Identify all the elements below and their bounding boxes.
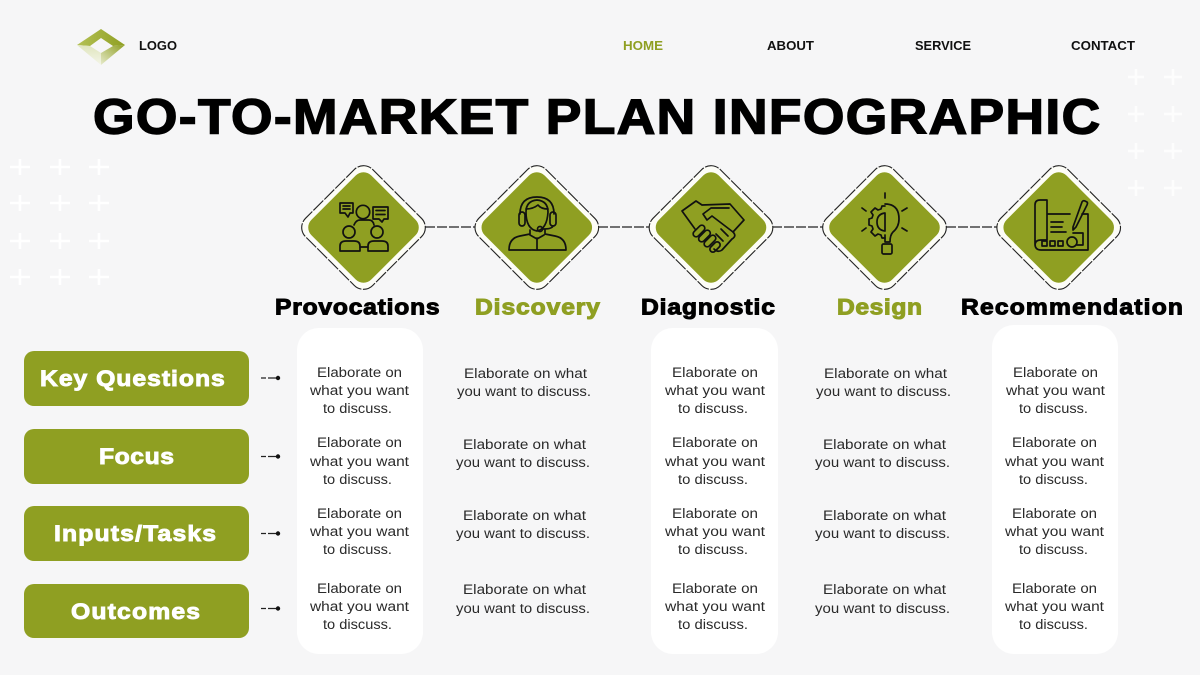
step headings: Discovery bbox=[475, 295, 600, 319]
text block: recommendation / focus: what you want bbox=[1004, 454, 1104, 469]
text block: discovery / focus bbox=[456, 437, 590, 470]
text block: design / focus: Elaborate on what bbox=[823, 437, 946, 452]
step 5 diamond: recommendation bbox=[992, 160, 1126, 295]
text block: recommendation / inputs bbox=[1004, 506, 1104, 557]
text block: discovery / outcomes: you want to discuss. bbox=[456, 601, 590, 616]
text block: recommendation / focus: Elaborate on bbox=[1012, 435, 1097, 450]
text block: recommendation / focus: to discuss. bbox=[1019, 472, 1088, 487]
text block: provocations / inputs: to discuss. bbox=[323, 542, 392, 557]
step headings: Recommendation bbox=[961, 295, 1183, 319]
text block: recommendation / key questions bbox=[1005, 365, 1105, 416]
navigation bbox=[623, 38, 1135, 53]
icon: idea bulb with gear bbox=[862, 193, 907, 254]
text block: design / outcomes bbox=[815, 582, 950, 616]
text block: diagnostic / focus: Elaborate on bbox=[672, 435, 758, 450]
logo: LOGO bbox=[139, 38, 177, 53]
row label: inputs/tasks: Inputs/Tasks bbox=[54, 522, 216, 547]
row label: outcomes bbox=[24, 584, 249, 638]
text block: recommendation / inputs: to discuss. bbox=[1019, 542, 1088, 557]
text block: diagnostic / inputs: to discuss. bbox=[678, 542, 748, 557]
text block: discovery / inputs bbox=[456, 508, 590, 541]
navigation: SERVICE bbox=[915, 38, 971, 53]
text block: provocations / focus: to discuss. bbox=[323, 472, 392, 487]
row label: key questions: Key Questions bbox=[40, 367, 225, 392]
text block: design / inputs: you want to discuss. bbox=[815, 526, 950, 541]
text block: discovery / inputs: you want to discuss. bbox=[456, 526, 590, 541]
text block: diagnostic / inputs: what you want bbox=[664, 524, 765, 539]
row label: key questions bbox=[24, 351, 249, 406]
text block: design / outcomes: Elaborate on what bbox=[823, 582, 946, 597]
text block: diagnostic / outcomes: to discuss. bbox=[678, 617, 748, 632]
text block: diagnostic / focus bbox=[664, 435, 765, 487]
row label: focus bbox=[24, 429, 249, 484]
text block: recommendation / key questions: to discuss. bbox=[1019, 401, 1088, 416]
text block: provocations / inputs: Elaborate on bbox=[317, 506, 402, 521]
navigation: ABOUT bbox=[767, 38, 814, 53]
step 4 diamond: design bbox=[817, 160, 952, 295]
navigation: CONTACT bbox=[1071, 38, 1135, 53]
text block: provocations / focus bbox=[309, 435, 409, 487]
text block: recommendation / outcomes: Elaborate on bbox=[1012, 581, 1097, 596]
decorative plus marks right bbox=[1128, 69, 1182, 196]
text block: diagnostic / key questions: what you want bbox=[664, 383, 765, 398]
text block: recommendation / key questions: Elaborate on bbox=[1013, 365, 1098, 380]
text block: design / inputs bbox=[815, 508, 950, 541]
text block: provocations / outcomes: to discuss. bbox=[323, 617, 392, 632]
text block: recommendation / inputs: Elaborate on bbox=[1012, 506, 1097, 521]
text block: provocations / key questions: what you want bbox=[309, 383, 409, 398]
navigation: HOME bbox=[623, 38, 663, 53]
text block: recommendation / outcomes: what you want bbox=[1004, 599, 1104, 614]
logo bbox=[77, 29, 177, 65]
text block: recommendation / key questions: what you want bbox=[1005, 383, 1105, 398]
text block: provocations / inputs bbox=[309, 506, 409, 557]
panel: white column 5 bbox=[992, 325, 1118, 654]
step headings: Diagnostic bbox=[641, 295, 775, 319]
text block: recommendation / outcomes bbox=[1004, 581, 1104, 632]
text block: provocations / key questions: to discuss. bbox=[323, 401, 392, 416]
text block: design / key questions: you want to discuss. bbox=[816, 384, 951, 399]
arrow: focus bbox=[261, 454, 280, 459]
row label: inputs/tasks bbox=[24, 506, 249, 561]
text block: discovery / key questions: Elaborate on what bbox=[464, 366, 587, 381]
text block: diagnostic / outcomes: what you want bbox=[664, 599, 765, 614]
arrow: inputs/tasks bbox=[261, 531, 280, 536]
text block: provocations / key questions: Elaborate on bbox=[317, 365, 402, 380]
step 1 diamond: provocations bbox=[296, 160, 431, 295]
arrow: outcomes bbox=[261, 606, 280, 611]
text block: diagnostic / key questions bbox=[664, 365, 765, 416]
step 3 diamond: diagnostic bbox=[644, 160, 778, 295]
text block: discovery / inputs: Elaborate on what bbox=[463, 508, 586, 523]
text block: provocations / outcomes: what you want bbox=[309, 599, 409, 614]
text block: provocations / focus: Elaborate on bbox=[317, 435, 402, 450]
row label: outcomes: Outcomes bbox=[71, 600, 200, 625]
text block: diagnostic / key questions: Elaborate on bbox=[672, 365, 758, 380]
text block: discovery / outcomes: Elaborate on what bbox=[463, 582, 586, 597]
text block: recommendation / outcomes: to discuss. bbox=[1019, 617, 1088, 632]
connector lines bbox=[425, 226, 997, 228]
icon: headset agent bbox=[509, 197, 566, 250]
text block: design / outcomes: you want to discuss. bbox=[815, 601, 950, 616]
text block: diagnostic / inputs bbox=[664, 506, 765, 557]
text block: provocations / focus: what you want bbox=[309, 454, 409, 469]
text block: design / focus bbox=[815, 437, 950, 470]
text block: provocations / outcomes bbox=[309, 581, 409, 632]
text block: diagnostic / focus: to discuss. bbox=[678, 472, 748, 487]
text block: discovery / key questions: you want to discuss. bbox=[457, 384, 591, 399]
text block: discovery / focus: you want to discuss. bbox=[456, 455, 590, 470]
text block: diagnostic / inputs: Elaborate on bbox=[672, 506, 758, 521]
text block: diagnostic / focus: what you want bbox=[664, 454, 765, 469]
text block: design / focus: you want to discuss. bbox=[815, 455, 950, 470]
text block: design / inputs: Elaborate on what bbox=[823, 508, 946, 523]
text block: diagnostic / outcomes: Elaborate on bbox=[672, 581, 758, 596]
text block: discovery / key questions bbox=[457, 366, 591, 399]
text block: design / key questions: Elaborate on what bbox=[824, 366, 947, 381]
icon: handshake bbox=[682, 201, 744, 253]
row label: focus: Focus bbox=[99, 445, 174, 470]
step 2 diamond: discovery bbox=[470, 160, 604, 295]
step headings: Provocations bbox=[275, 295, 440, 319]
arrow: key questions bbox=[261, 376, 280, 380]
text block: diagnostic / key questions: to discuss. bbox=[678, 401, 748, 416]
text block: discovery / focus: Elaborate on what bbox=[463, 437, 586, 452]
text block: design / key questions bbox=[816, 366, 951, 399]
text block: discovery / outcomes bbox=[456, 582, 590, 616]
text block: provocations / key questions bbox=[309, 365, 409, 416]
text block: recommendation / inputs: what you want bbox=[1004, 524, 1104, 539]
step headings bbox=[275, 295, 1183, 319]
panel: white column 3 bbox=[651, 328, 778, 654]
decorative plus marks left bbox=[10, 159, 109, 285]
text block: diagnostic / outcomes bbox=[664, 581, 765, 632]
step headings: Design bbox=[837, 295, 922, 319]
icon: blueprint and pencil bbox=[1035, 200, 1088, 250]
text block: recommendation / focus bbox=[1004, 435, 1104, 487]
text block: provocations / inputs: what you want bbox=[309, 524, 409, 539]
title: GO-TO-MARKET PLAN INFOGRAPHIC bbox=[93, 90, 1100, 144]
icon: people discussing bbox=[340, 203, 388, 251]
panel: white column 1 bbox=[297, 328, 423, 654]
text block: provocations / outcomes: Elaborate on bbox=[317, 581, 402, 596]
